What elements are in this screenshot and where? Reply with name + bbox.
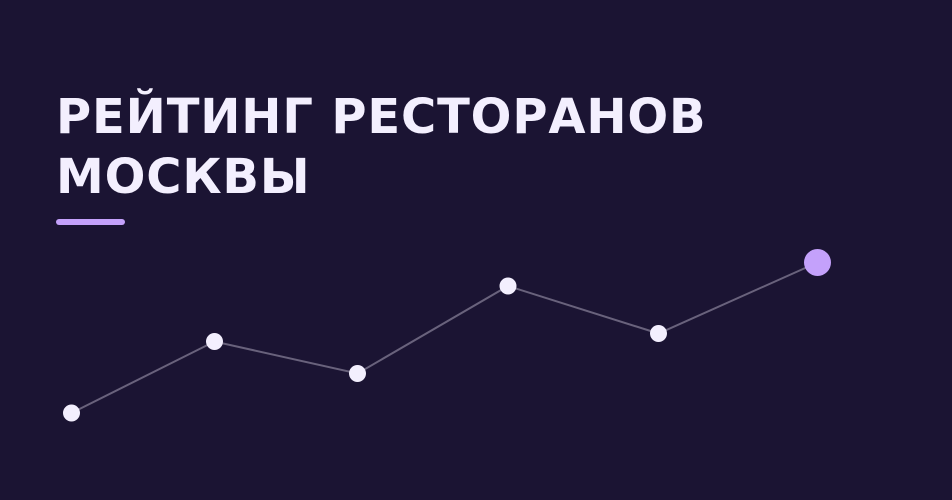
title xyxy=(56,88,706,205)
title: РЕЙТИНГ РЕСТОРАНОВ xyxy=(56,89,706,145)
highlighted final point xyxy=(804,249,831,276)
trend line xyxy=(72,262,818,413)
data points xyxy=(63,278,667,422)
accent underline xyxy=(56,219,125,225)
title: МОСКВЫ xyxy=(56,149,310,205)
